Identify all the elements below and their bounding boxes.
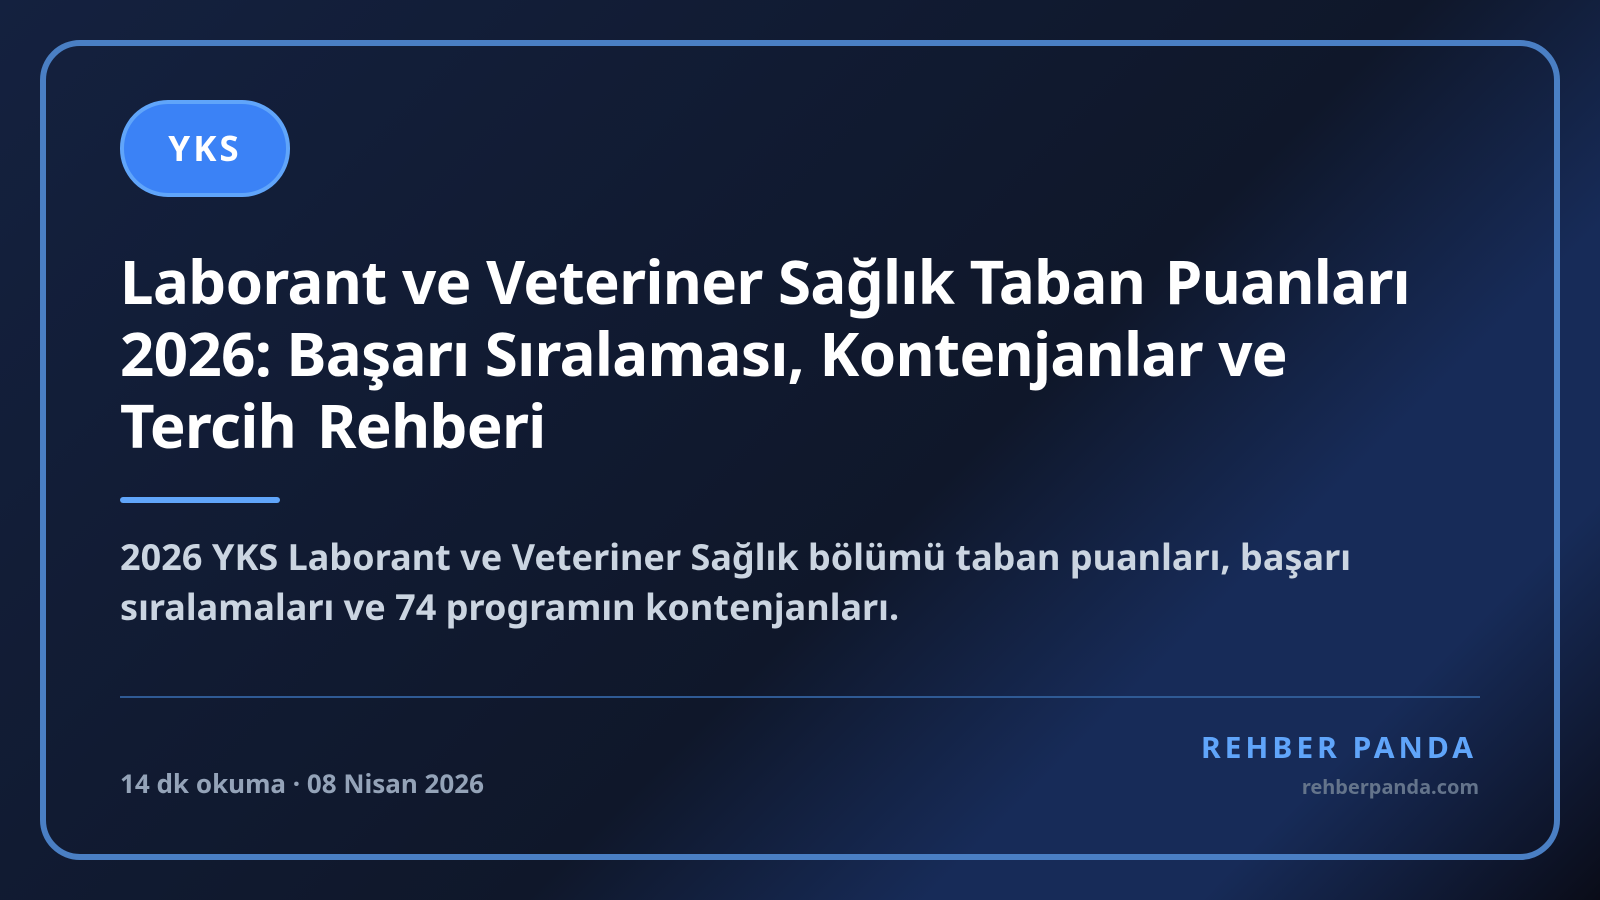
brand name: REHBER PANDA [1201, 726, 1477, 767]
meta: reading time and date: 14 dk okuma · 08 Nisan 2026 [120, 765, 484, 801]
subtitle: 2026 YKS Laborant ve Veteriner Sağlık bölümü taban puanları, başarı [120, 532, 1351, 581]
subtitle: sıralamaları ve 74 programın kontenjanları. [120, 582, 899, 631]
title: Laborant ve Veteriner Sağlık Taban Puanları [120, 240, 1410, 322]
subtitle [120, 532, 1351, 631]
title [120, 240, 1410, 466]
badge: YKS: YKS [168, 125, 242, 172]
brand url: rehberpanda.com [1302, 773, 1479, 800]
title: 2026: Başarı Sıralaması, Kontenjanlar ve [120, 312, 1287, 394]
badge: YKS [120, 100, 290, 197]
accent bar [120, 497, 280, 503]
divider [120, 696, 1480, 698]
title: Tercih Rehberi [120, 384, 546, 466]
